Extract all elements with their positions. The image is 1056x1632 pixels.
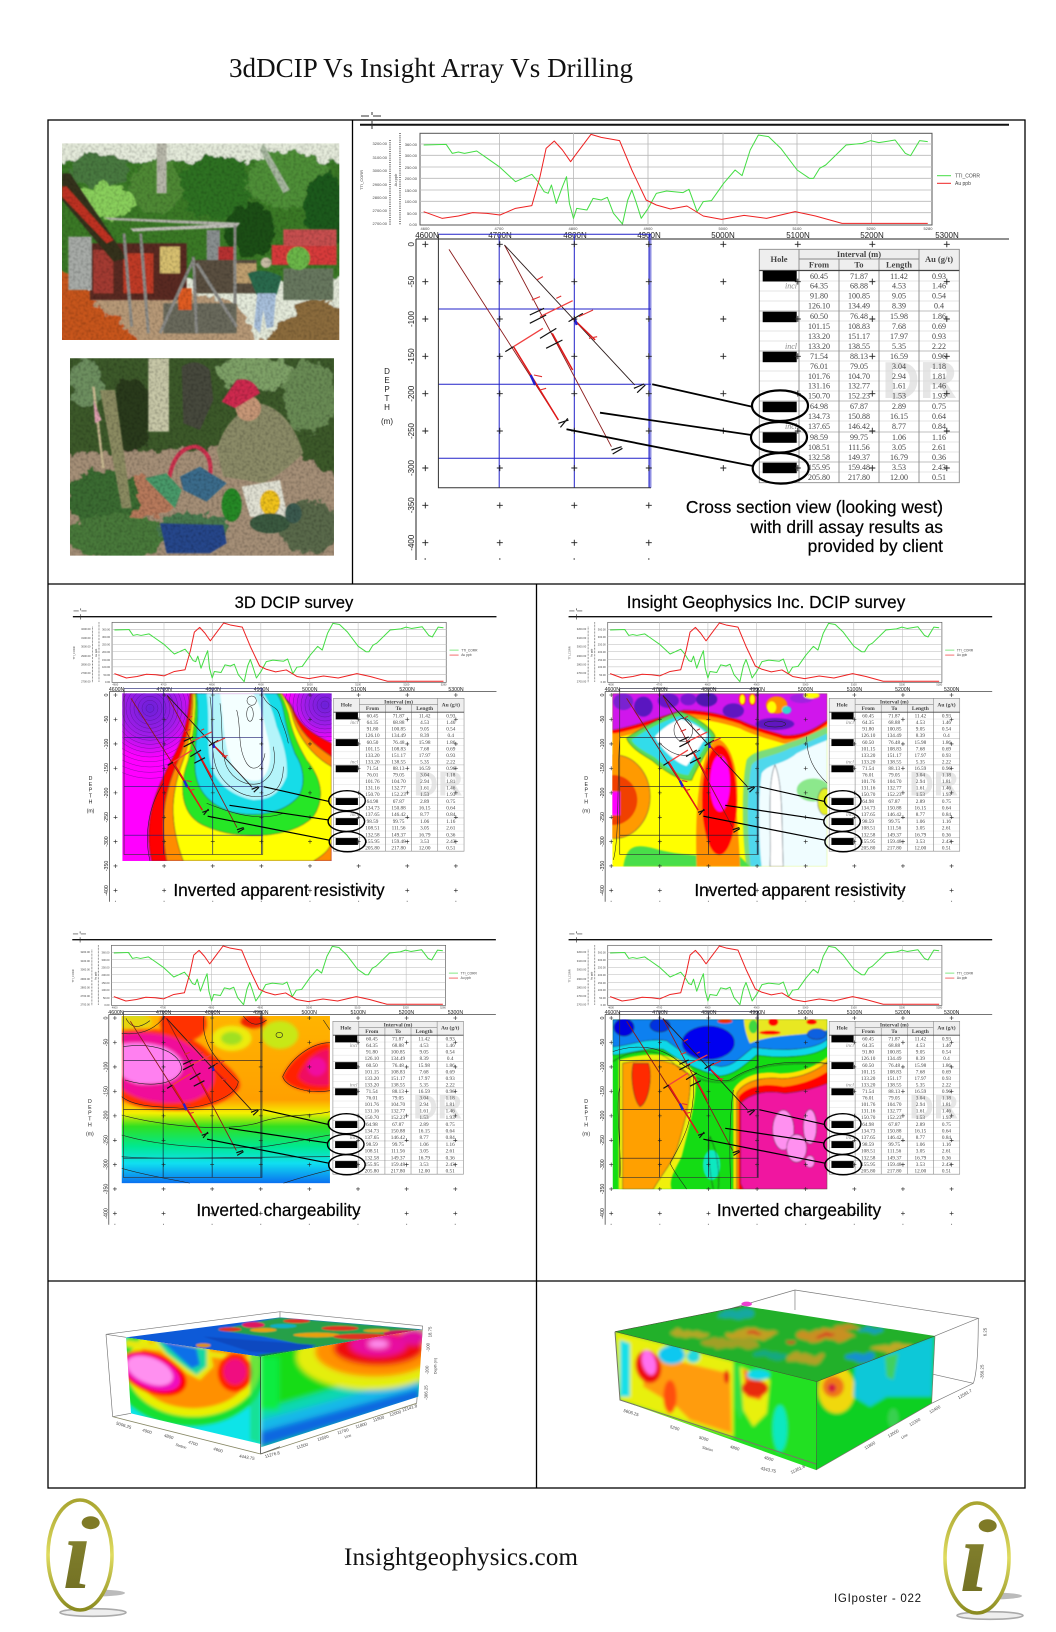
line chart: TTI_CORR and Au ppb: 4800 [569,226,578,231]
figure copy: Insight resistivity [568,608,992,902]
3D block: DCIP volume: Line [344,1433,352,1439]
section axis ticks and station labels: 5000N [711,231,735,240]
caption lines: Cross section view (looking west) [686,497,943,517]
3D block: DCIP volume: 5006.25 [116,1421,133,1430]
line chart: TTI_CORR and Au ppb: 4600 [421,226,430,231]
watermark DR: DR [882,352,957,410]
line chart: TTI_CORR and Au ppb: 200.00 [405,176,418,181]
line chart: TTI_CORR and Au ppb: 5280 [924,226,933,231]
assay table: 101.15 [808,322,830,331]
figure copy: Insight chargeability [568,931,992,1225]
photo: operator with instrument in forest [70,358,334,556]
assay table: 11.42 [890,272,908,281]
line chart: TTI_CORR and Au ppb: 4700 [495,226,504,231]
assay table: 1.18 [932,362,946,371]
frame and panel dividers [48,120,1025,1488]
assay table: 0.69 [932,322,946,331]
assay table: Interval (m) [837,249,881,259]
assay table: 16.79 [890,453,908,462]
chart legend [937,174,980,187]
assay table: 108.83 [848,322,870,331]
line chart: TTI_CORR and Au ppb: 100.00 [405,199,418,204]
assay table: 76.48 [850,312,868,321]
3D block: DCIP volume: 4800 [163,1433,175,1441]
caption: resistivity right: Inverted apparent resistivity [694,880,906,900]
3D block: Insight volume: Line [900,1433,908,1440]
assay table: 0.4 [934,302,944,310]
assay table: 1.06 [892,433,906,442]
assay table: 146.42 [848,422,870,431]
3D block: DCIP volume: -100 [425,1342,430,1352]
assay table: 16.59 [890,352,908,361]
section axis ticks and station labels: -300 [407,459,416,476]
redacted hole names [763,271,797,473]
section axis ticks and station labels: H [384,403,390,412]
website footer: Insightgeophysics.com [344,1544,579,1571]
section axis ticks and station labels: D [384,367,390,376]
assay table: 131.16 [808,382,830,390]
caption lines [686,497,943,556]
section axis ticks and station labels: 5300N [935,231,959,240]
assay table: 91.80 [810,292,828,300]
assay table: 2.43 [932,463,946,472]
assay table: Length [886,260,912,270]
section axis ticks and station labels: E [384,376,390,385]
assay table: 67.87 [850,402,868,411]
assay table: 0.96 [932,352,946,361]
assay table: 0.64 [932,412,946,421]
assay table: 8.77 [892,422,906,431]
line chart: TTI_CORR and Au ppb: 5200 [867,226,876,231]
3D block: Insight volume: 12200 [908,1417,922,1427]
section axis ticks and station labels: -150 [407,348,416,364]
section axis ticks and station labels: -50 [407,275,416,287]
section cross markers [422,241,952,559]
line chart: TTI_CORR and Au ppb: 5100 [793,226,802,231]
section axis ticks and station labels: 5100N [786,231,810,240]
assay table: 15.98 [890,312,908,321]
assay table: 68.88 [850,282,868,290]
3D block: DCIP volume: 4600 [213,1446,224,1454]
section axis ticks and station labels: -200 [407,385,416,402]
assay table: 151.17 [848,332,870,341]
line chart: TTI_CORR and Au ppb: 2800.00 [373,195,388,200]
assay table: 60.45 [810,272,828,281]
line chart: TTI_CORR and Au ppb: 3000.00 [373,168,388,173]
caption: resistivity left: Inverted apparent resistivity [173,880,385,900]
assay table [759,249,959,483]
3D block: DCIP volume: 11500 [296,1442,309,1450]
assay table: incl [785,342,798,351]
assay table: 1.53 [892,392,906,400]
assay table: 101.76 [808,372,830,381]
line chart: TTI_CORR and Au ppb: 3200.00 [373,141,388,146]
assay table: 138.55 [848,342,870,351]
3D block: DCIP volume: Depth (m) [434,1358,438,1374]
section axis ticks and station labels: 4800N [563,231,587,240]
3D block: DCIP volume [106,1312,443,1461]
3D block: DCIP volume: 11600 [317,1434,330,1442]
caption lines: provided by client [808,536,943,556]
section axis ticks and station labels: 4700N [488,231,512,240]
assay table: 98.59 [810,433,828,442]
section axis ticks and station labels: -350 [407,497,416,513]
assay table: 9.05 [892,292,906,300]
line chart: TTI_CORR and Au ppb: 0.00 [409,222,418,227]
3D block: DCIP volume: 11700 [337,1427,350,1435]
assay table: 71.87 [850,272,868,281]
section grid [438,234,651,488]
line chart: TTI_CORR and Au ppb: TTI_CORR [359,170,364,190]
line chart: TTI_CORR and Au ppb: 5000 [719,226,728,231]
assay table: 5.35 [892,342,906,351]
section axis ticks and station labels: T [385,394,390,403]
assay table: incl [785,282,798,290]
assay table: 1.86 [932,312,946,321]
assay table: 126.10 [808,302,830,310]
assay table: 1.46 [932,382,946,390]
3D block: DCIP volume: 12000 [389,1409,402,1417]
3D block: Insight volume: 5200 [669,1424,681,1432]
caption mask and text: cross section view [662,488,992,568]
assay table: To [854,260,864,270]
3D block: Insight volume: 6.25 [983,1327,988,1336]
chart legend: Au ppb [955,181,971,187]
3D block: DCIP volume: 11276.8 [264,1450,281,1459]
assay table: 1.61 [892,382,906,390]
assay table: 150.70 [808,392,830,400]
assay table: 60.50 [810,312,828,321]
3D block: DCIP volume: 18.75 [428,1326,433,1337]
assay table: 132.58 [808,453,830,462]
assay table: Hole [770,254,788,264]
assay table: 2.22 [932,342,946,351]
heading: Insight survey: Insight Geophysics Inc. DCIP survey [627,592,906,612]
3D block: DCIP volume: Station [175,1443,187,1450]
3D block: Insight volume [600,1290,988,1475]
assay table: 1.46 [932,282,946,290]
assay table: 79.05 [850,362,868,371]
assay table: 217.80 [848,473,870,482]
section axis ticks and station labels: (m) [381,417,393,426]
assay table: 205.80 [808,473,830,482]
line chart: TTI_CORR and Au ppb: 2700.00 [373,221,388,226]
assay table: 0.36 [932,453,946,462]
line chart: TTI_CORR and Au ppb: 3100.00 [373,155,388,160]
assay table: incl [785,422,798,431]
section axis ticks and station labels: -400 [407,534,416,551]
assay table: 150.88 [848,412,870,421]
assay table: 108.51 [808,443,830,452]
poster id: IGIposter - 022 [834,1593,921,1605]
assay table: 104.70 [848,372,870,381]
line chart: TTI_CORR and Au ppb: 4900 [644,226,653,231]
assay table: 134.49 [848,302,870,310]
3D block: DCIP volume: -200 [425,1365,430,1374]
assay table: 149.37 [848,453,870,462]
section axis ticks and station labels: -250 [407,422,416,439]
assay table: 71.54 [810,352,828,361]
heading: 3D DCIP survey: 3D DCIP survey [235,593,354,612]
map: Insight inverted resistivity [612,693,828,867]
line chart: TTI_CORR and Au ppb: 2900.00 [373,182,388,187]
section axis ticks and station labels: 0 [407,242,416,247]
assay table: 4.53 [892,282,906,290]
assay table: 7.68 [892,322,906,331]
3D block: Insight volume: 12400 [928,1404,942,1415]
line chart: TTI_CORR and Au ppb: 150.00 [405,188,418,193]
assay table: 133.20 [808,342,830,351]
line chart: TTI_CORR and Au ppb: 360.00 [405,142,418,147]
assay table: 99.75 [850,433,868,442]
section axis ticks and station labels: 5200N [860,231,884,240]
3D block: DCIP volume: 11800 [355,1421,368,1429]
assay table: 12.00 [890,473,908,482]
figure: top panel profile, section and assay table [359,112,1009,560]
assay table: 2.89 [892,402,906,411]
assay table: 2.94 [892,372,906,381]
assay table: 100.85 [848,292,870,300]
3D block: Insight volume: 4600 [763,1455,775,1463]
assay table: 17.97 [890,332,908,341]
assay table: 0.75 [932,402,946,411]
3D block: DCIP volume: 4700 [188,1439,199,1447]
section axis ticks and station labels: P [384,385,390,394]
map: 3D DCIP inverted chargeability [118,1005,330,1183]
leader lines and hole ellipses [566,384,809,484]
section axis ticks and station labels [381,231,1009,560]
assay table: 76.01 [810,362,828,371]
caption lines: with drill assay results as [750,517,943,537]
3D block: Insight volume: 11351.8 [790,1464,806,1475]
logo right [945,1501,1023,1619]
assay table: 111.56 [848,443,870,452]
assay table: 3.04 [892,362,906,371]
assay table: 3.53 [892,463,906,472]
3D block: Insight volume: 5606.25 [623,1408,640,1417]
assay table: 64.35 [810,282,828,290]
3D block: Insight volume: 5000 [698,1435,710,1443]
3D block: Insight volume: 12000 [887,1428,900,1439]
3D block: DCIP volume: 4900 [142,1427,153,1435]
3D block: Insight volume: -356.25 [979,1364,984,1379]
drill holes [449,245,645,454]
line chart: TTI_CORR and Au ppb: 2700.00 [373,208,388,213]
figure copy: 3D DCIP chargeability [71,931,496,1225]
chart legend: TTI_CORR [955,174,980,180]
line chart: TTI_CORR and Au ppb [359,133,933,231]
3D block: Insight volume: 12581.7 [957,1388,973,1400]
assay table: Au (g/t) [925,254,953,264]
map: 3D DCIP inverted resistivity [122,693,332,861]
assay table: From [809,260,829,270]
assay table: 64.98 [810,402,828,411]
3D block: DCIP volume: 12141.8 [401,1403,418,1413]
3D block: Insight volume: Station [702,1445,714,1453]
3D block: Insight volume: 11800 [864,1440,877,1450]
assay table: 0.54 [932,292,946,300]
section axis ticks and station labels: 4600N [415,231,439,240]
assay table: 152.23 [848,392,870,400]
line chart: TTI_CORR and Au ppb: 300.00 [405,153,418,158]
assay table: 1.16 [932,433,946,442]
header rule and crosshair [360,124,1009,126]
figure copy: 3D DCIP resistivity [72,608,496,902]
3D block: DCIP volume: 11900 [372,1414,385,1423]
logo left: ı [63,1498,91,1611]
assay table: 137.65 [808,422,830,431]
line chart: TTI_CORR and Au ppb: 50.00 [407,211,418,216]
3D block: Insight volume: 4800 [729,1444,741,1452]
assay table: 0.84 [932,422,946,431]
caption: chargeability right: Inverted chargeability [717,1200,881,1220]
assay table: 88.13 [850,352,868,361]
3D block: Insight volume: 4343.75 [760,1466,777,1474]
section axis ticks and station labels: -100 [407,310,416,327]
assay table: 1.93 [932,392,946,400]
assay table: 2.61 [932,443,946,452]
line chart: TTI_CORR and Au ppb: 250.00 [405,165,418,170]
map: Insight inverted chargeability [613,1018,827,1189]
caption: chargeability left: Inverted chargeability [196,1200,361,1220]
assay table: 0.93 [932,332,946,341]
logo left [48,1498,126,1616]
title: 3dDCIP Vs Insight Array Vs Drilling [229,53,633,83]
assay table: 159.48 [848,463,870,472]
3D block: DCIP volume: -306.25 [423,1385,428,1400]
assay table: 1.81 [932,372,946,381]
cyan resistive body [627,712,715,780]
photo: drill rig in jungle [62,143,340,340]
assay table: 8.39 [892,302,906,310]
3D block: DCIP volume: 4443.75 [239,1453,256,1461]
assay table: 3.05 [892,443,906,452]
section axis ticks and station labels: 4900N [637,231,661,240]
line chart: TTI_CORR and Au ppb: Au ppb [393,173,398,186]
assay table: 155.95 [808,463,830,472]
assay table: 132.77 [848,382,870,390]
assay table: 0.51 [932,473,946,482]
assay table: 0.93 [932,272,946,281]
assay table: 134.73 [808,412,830,421]
assay table: 133.20 [808,332,830,341]
assay table: 16.15 [890,412,908,421]
